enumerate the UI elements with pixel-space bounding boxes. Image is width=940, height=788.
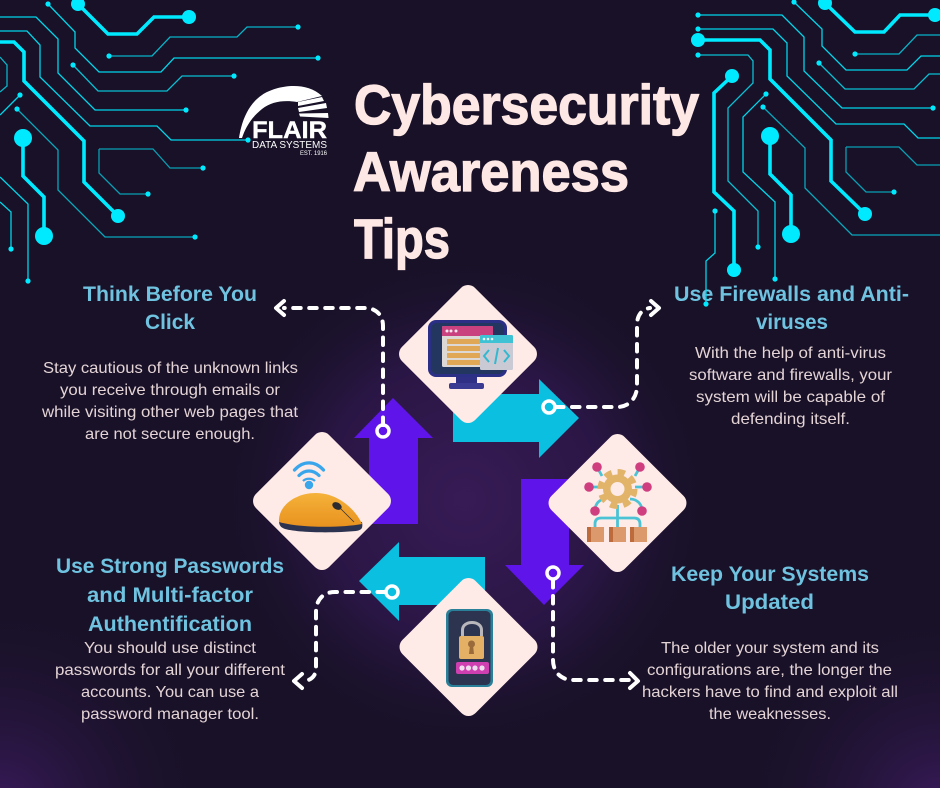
tip: Keep Your Systems Updated: configurations are, the longer the (647, 662, 892, 679)
tip: Use Firewalls and Anti-viruses: viruses (756, 311, 828, 334)
logo: Flair Data Systems: DATA SYSTEMS (252, 139, 327, 151)
title (353, 73, 699, 270)
logo: Flair Data Systems: EST. 1916 (300, 151, 328, 157)
tip: Use Strong Passwords and Multi-factor Authentification: passwords for all your different (55, 662, 286, 679)
tip: Use Strong Passwords and Multi-factor Authentification: password manager tool. (81, 706, 259, 723)
dashed connector: to Think Before You Click (276, 301, 389, 437)
diamond panel: bottom (395, 574, 542, 720)
tip: Think Before You Click: while visiting other web pages that (41, 404, 299, 421)
tip: Think Before You Click: Stay cautious of the unknown links (43, 360, 298, 377)
diamond panel: right (544, 430, 691, 576)
tip: Use Strong Passwords and Multi-factor Authentification (55, 555, 286, 723)
tip: Think Before You Click: Think Before You (83, 283, 257, 306)
title: Awareness (353, 140, 629, 203)
icon: gear with network nodes (584, 462, 652, 542)
logo: Flair Data Systems (239, 86, 328, 157)
icon: monitor with code window (428, 320, 513, 389)
tip: Use Firewalls and Anti-viruses: software and firewalls, your (689, 367, 893, 384)
tip: Keep Your Systems Updated: hackers have to find and exploit all (642, 684, 898, 701)
title: Tips (354, 207, 450, 270)
logo: Flair Data Systems: FLAIR (252, 117, 327, 144)
tip: Use Strong Passwords and Multi-factor Authentification: Authentification (88, 613, 252, 636)
tip: Use Strong Passwords and Multi-factor Authentification: and Multi-factor (87, 584, 253, 607)
tip: Use Firewalls and Anti-viruses (674, 283, 909, 428)
tip: Use Firewalls and Anti-viruses: defending itself. (731, 411, 850, 428)
diamond panel: left (249, 428, 395, 574)
dashed connector: to Keep Your Systems Updated (547, 567, 638, 688)
title: Cybersecurity (354, 73, 699, 136)
tip: Keep Your Systems Updated (642, 563, 898, 723)
arrow: cyan left (359, 542, 485, 621)
tip: Use Strong Passwords and Multi-factor Authentification: accounts. You can use a (81, 684, 259, 701)
diamond panel: top (395, 281, 541, 427)
tip: Use Strong Passwords and Multi-factor Authentification: Use Strong Passwords (56, 555, 284, 578)
circuit lines: top left (0, 0, 321, 284)
tip: Think Before You Click: are not secure enough. (85, 426, 255, 443)
tip: Keep Your Systems Updated: The older your system and its (661, 640, 879, 657)
tip: Keep Your Systems Updated: Updated (725, 591, 814, 614)
arrow: purple up (354, 398, 433, 524)
tip: Use Firewalls and Anti-viruses: With the help of anti-virus (695, 345, 886, 362)
arrow: cyan right (453, 379, 579, 458)
tip: Think Before You Click: you receive through emails or (60, 382, 281, 399)
tip: Use Strong Passwords and Multi-factor Authentification: You should use distinct (84, 640, 257, 657)
tip: Think Before You Click: Click (145, 311, 195, 334)
tip: Keep Your Systems Updated: Keep Your Systems (671, 563, 869, 586)
dashed connector: to Use Firewalls and Anti-viruses (543, 301, 659, 413)
circuit lines: top right (691, 0, 940, 307)
icon: phone with padlock (446, 609, 493, 687)
tip: Keep Your Systems Updated: the weaknesses. (709, 706, 831, 723)
icon: wireless mouse (279, 463, 362, 532)
arrow: purple down (505, 479, 584, 605)
dashed connector: to Use Strong Passwords (294, 586, 398, 688)
tip: Think Before You Click (41, 283, 299, 443)
tip: Use Firewalls and Anti-viruses: Use Firewalls and Anti- (674, 283, 909, 306)
tip: Use Firewalls and Anti-viruses: system will be capable of (696, 389, 886, 406)
